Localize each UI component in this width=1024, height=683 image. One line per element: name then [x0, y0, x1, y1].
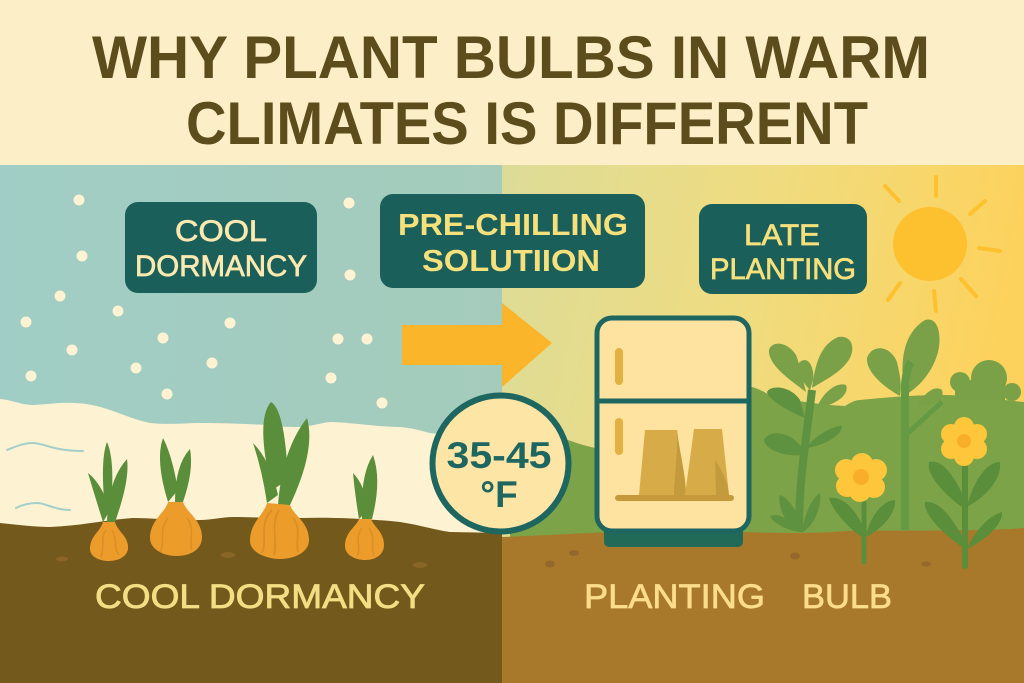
title banner: CLIMATES IS DIFFERENT	[186, 90, 868, 157]
panel: cool side	[0, 165, 502, 540]
sun	[885, 177, 1000, 311]
label: pre-chilling solution: PRE-CHILLING	[398, 207, 628, 242]
label: late planting	[699, 204, 867, 294]
label: cool dormancy: COOL	[175, 215, 267, 248]
refrigerator	[597, 318, 749, 547]
temperature badge: 35-45	[446, 435, 552, 476]
flower 1	[829, 453, 895, 562]
label: cool dormancy: DORMANCY	[135, 250, 307, 283]
temperature badge	[432, 396, 568, 532]
right ground label: PLANTING	[584, 578, 765, 616]
label: cool dormancy	[125, 202, 317, 293]
green hill	[510, 387, 1024, 545]
label: late planting: PLANTING	[710, 253, 856, 286]
label: late planting: LATE	[744, 219, 820, 252]
bulb 2	[150, 438, 202, 556]
right ground label	[584, 578, 892, 616]
bulb 1	[88, 442, 128, 561]
title: WHY PLANT BULBS IN WARM	[92, 24, 930, 91]
snow bank	[0, 399, 502, 540]
arrow	[402, 303, 552, 387]
soil pebbles	[56, 552, 427, 568]
temperature badge: °F	[480, 474, 518, 515]
bulb 3	[250, 402, 309, 559]
right soil	[502, 528, 1024, 683]
seed bags	[639, 429, 729, 495]
background plant 2	[867, 319, 943, 530]
snowflakes	[20, 194, 388, 408]
label: pre-chilling solution	[380, 194, 645, 288]
label: pre-chilling solution: SOLUTIION	[422, 243, 600, 278]
wind lines	[7, 443, 83, 510]
background plant 1	[764, 337, 852, 532]
right ground label: BULB	[802, 578, 892, 616]
left ground label: COOL DORMANCY	[95, 578, 425, 616]
bulb 4	[345, 455, 384, 560]
left soil	[0, 517, 502, 683]
panel: warm side	[502, 165, 1024, 545]
title banner	[0, 0, 1024, 165]
flower 2	[925, 417, 1002, 566]
background plant 3	[950, 360, 1021, 401]
